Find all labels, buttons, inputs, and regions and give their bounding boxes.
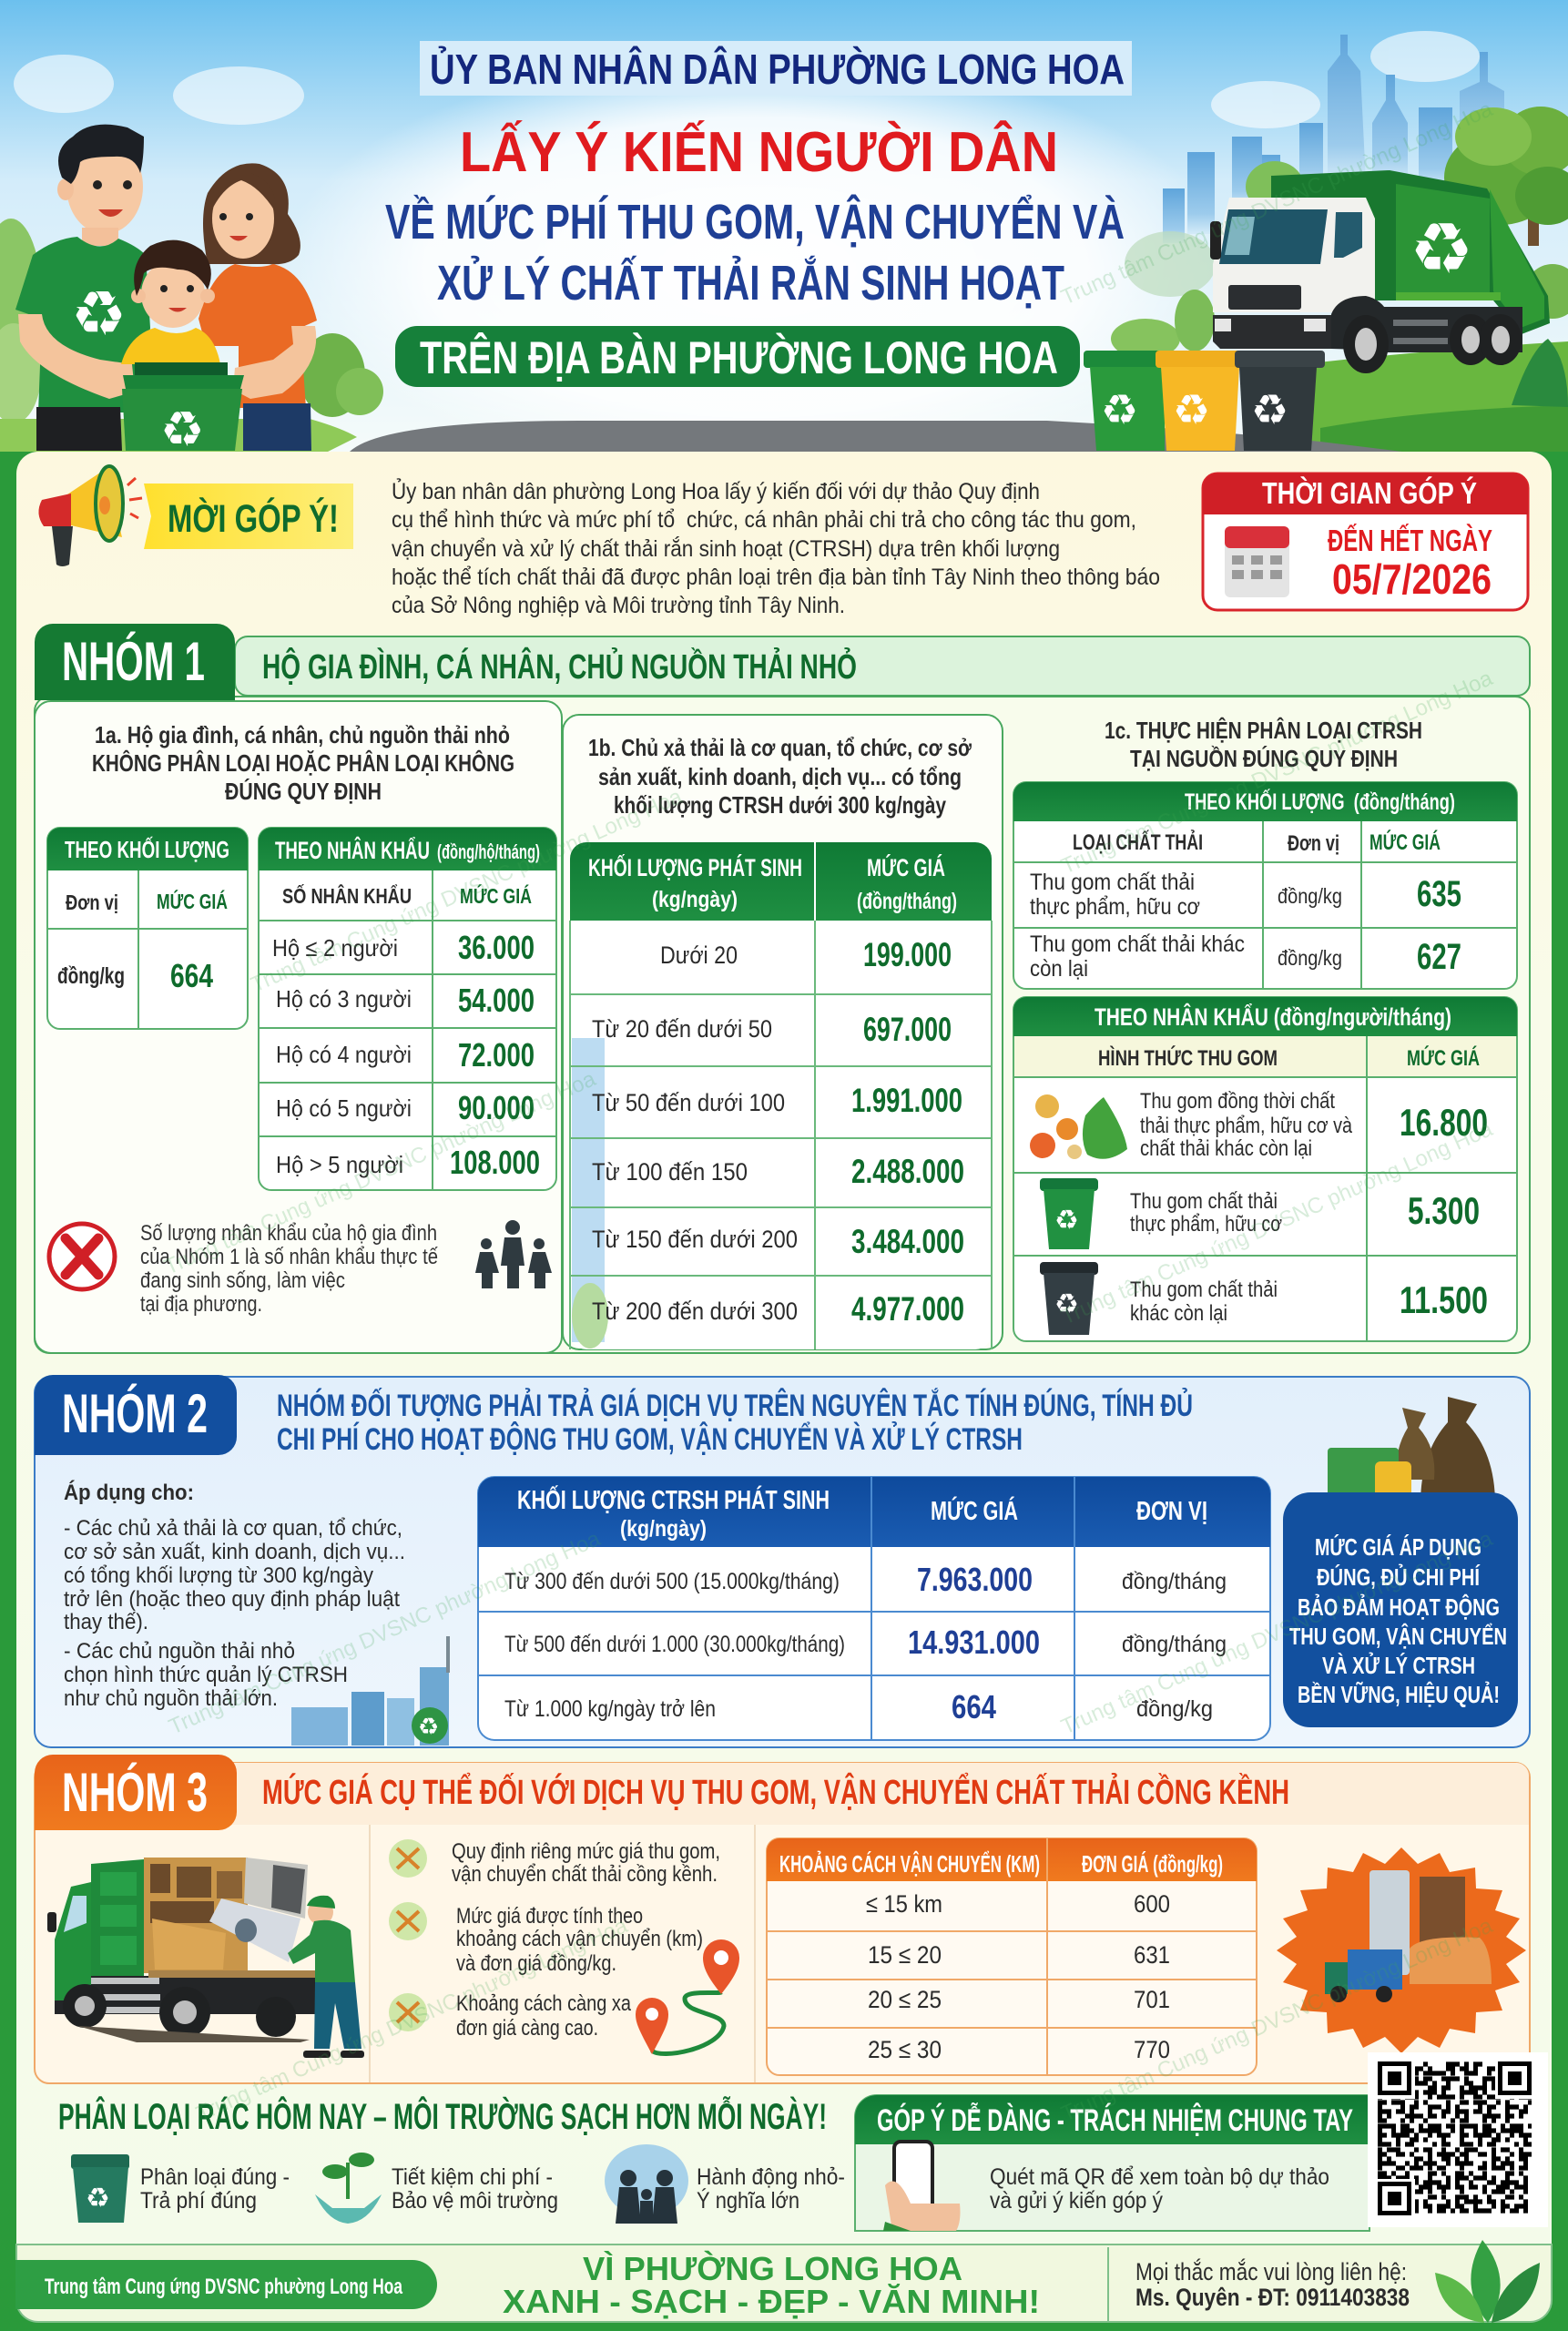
watermarks: Trung tâm Cung ứng DVSNC phường Long Hoa <box>160 1066 600 1279</box>
man <box>15 125 150 451</box>
footer: motto <box>503 2249 1040 2320</box>
table: 1b rates <box>570 842 992 1349</box>
table: by household members: 54.000 <box>458 982 535 1019</box>
table: 1b rates: MỨC GIÁ <box>867 853 945 881</box>
table: 1c by weight: Thu gom chất thải khác <box>1030 931 1245 957</box>
icon: map pins <box>636 1939 739 2054</box>
icon: bullet 3 <box>389 1993 427 2031</box>
table: 1c by person: 16.800 <box>1400 1101 1488 1144</box>
icon: phone in hand <box>883 2142 960 2231</box>
table: 1c by weight: đồng/kg <box>1278 884 1342 908</box>
table: distance rates: ≤ 15 km <box>866 1890 942 1918</box>
table: by household members: 108.000 <box>450 1144 540 1181</box>
watermarks: Trung tâm Cung ứng DVSNC phường Long Hoa <box>1057 1116 1497 1329</box>
table: 1b rates: 3.484.000 <box>851 1223 964 1260</box>
title: committee: ỦY BAN NHÂN DÂN PHƯỜNG LONG HOA <box>430 46 1125 93</box>
icon: city: ♻ <box>418 1714 439 1741</box>
slogan: PHÂN LOẠI RÁC HÔM NAY – MÔI TRƯỜNG SẠCH HƠN MỖI NGÀY! <box>58 2095 827 2137</box>
table: by household members: 90.000 <box>458 1089 535 1126</box>
panel: deadline: ĐẾN HẾT NGÀY <box>1328 524 1492 557</box>
footer: motto: XANH - SẠCH - ĐẸP - VĂN MINH! <box>503 2283 1040 2320</box>
icon: city <box>291 1636 450 1746</box>
text: applies to: Áp dụng cho: <box>64 1480 194 1505</box>
table: 1b rates: Từ 150 đến dưới 200 <box>592 1226 798 1253</box>
text: applies to: như chủ nguồn thải lớn. <box>64 1686 278 1711</box>
callout: price note: ĐÚNG, ĐỦ CHI PHÍ <box>1317 1562 1481 1591</box>
table: 1b rates: 697.000 <box>863 1011 952 1048</box>
table: 1b rates: (kg/ngày) <box>652 887 738 912</box>
text: applies to: trở lên (hoặc theo quy định pháp luật <box>64 1587 400 1612</box>
text: applies to: có tổng khối lượng từ 300 kg/ngày <box>64 1563 373 1588</box>
text: intro paragraph: Ủy ban nhân dân phường Long Hoa lấy ý kiến đối với dự thảo Quy định <box>392 477 1040 504</box>
table: by household members: Hộ có 5 người <box>276 1094 412 1122</box>
table: group 2 rates: 664 <box>952 1688 996 1725</box>
icon: green bin <box>1040 1178 1098 1249</box>
group 1 header bar <box>235 636 1530 696</box>
panel: 1c <box>1013 717 1517 1341</box>
text: applies to <box>64 1480 405 1711</box>
icon: dark bin: ♻ <box>1054 1288 1079 1320</box>
road <box>350 421 1402 452</box>
table: group 2 rates: KHỐI LƯỢNG CTRSH PHÁT SINH <box>517 1484 830 1515</box>
panel: easy feedback: GÓP Ý DỄ DÀNG - TRÁCH NHIỆM CHUNG TAY <box>877 2103 1353 2138</box>
table: group 2 rates: đồng/tháng <box>1122 1569 1227 1594</box>
table: by weight: 664 <box>170 957 213 994</box>
table: group 2 rates <box>478 1477 1270 1740</box>
man: ♻ <box>71 279 127 351</box>
icon: family silhouette <box>475 1220 552 1288</box>
1c heading: 1c. THỰC HIỆN PHÂN LOẠI CTRSH <box>1105 717 1422 744</box>
table: by household members: 72.000 <box>458 1036 535 1074</box>
table: group 2 rates: Từ 500 đến dưới 1.000 (30.000kg/tháng) <box>504 1632 845 1657</box>
tree right <box>1444 107 1568 246</box>
group 1 outer frame <box>35 697 1530 1353</box>
table: group 2 rates: (kg/ngày) <box>620 1516 707 1542</box>
table: by weight: MỨC GIÁ <box>157 889 228 913</box>
text: applies to: chọn hình thức quản lý CTRSH <box>64 1663 348 1687</box>
1b heading: 1b. Chủ xả thải là cơ quan, tổ chức, cơ sở <box>588 734 972 761</box>
table: by household members: Hộ > 5 người <box>276 1151 403 1178</box>
table: 1b rates: Dưới 20 <box>660 942 738 969</box>
table: 1c by weight: thực phẩm, hữu cơ <box>1030 894 1200 920</box>
three bins: ♻ <box>1173 385 1210 434</box>
watermarks: Trung tâm Cung ứng DVSNC phường Long Hoa <box>1057 1913 1497 2126</box>
table: 1c by person: THEO NHÂN KHẨU (đồng/người/tháng) <box>1095 1003 1451 1031</box>
bottom section <box>58 2052 1548 2231</box>
group 3 header strip <box>36 1763 1529 1825</box>
benefit 1: Trả phí đúng <box>140 2188 257 2214</box>
benefit 2: Bảo vệ môi trường <box>392 2188 558 2214</box>
table: group 2 rates: ĐƠN VỊ <box>1136 1497 1207 1526</box>
table: 1c by weight: LOẠI CHẤT THẢI <box>1073 829 1203 855</box>
icon: bullet 1 <box>389 1839 427 1878</box>
table: group 2 rates: đồng/tháng <box>1122 1632 1227 1657</box>
group 2 title: CHI PHÍ CHO HOẠT ĐỘNG THU GOM, VẬN CHUYỂN VÀ XỬ LÝ CTRSH <box>277 1421 1023 1457</box>
left trees <box>0 219 42 382</box>
illustration: truck with bulky waste <box>47 1858 364 2058</box>
group 2 title <box>277 1388 1193 1457</box>
table: by household members: 36.000 <box>458 929 535 966</box>
group 2 panel <box>35 1377 1530 1747</box>
worker <box>308 1899 333 1925</box>
text: intro paragraph <box>392 477 1160 618</box>
icon: sorting bin <box>71 2154 129 2223</box>
watermarks <box>160 97 1497 2126</box>
benefit 1 <box>140 2164 290 2214</box>
table: 1c by weight: 635 <box>1417 874 1461 914</box>
family bin <box>122 362 244 458</box>
table: 1c by person: thải thực phẩm, hữu cơ và <box>1140 1114 1353 1138</box>
footer: contact: Mọi thắc mắc vui lòng liên hệ: <box>1135 2257 1407 2285</box>
grass left <box>0 419 357 452</box>
1a heading: 1a. Hộ gia đình, cá nhân, chủ nguồn thải nhỏ <box>95 721 510 748</box>
footer: contact: Ms. Quyên - ĐT: 0911403838 <box>1135 2284 1410 2311</box>
title block <box>385 41 1132 387</box>
table: by weight: đồng/kg <box>57 963 125 989</box>
table: distance rates: 631 <box>1134 1941 1170 1969</box>
group 3 panel <box>35 1763 1530 2083</box>
table: 1c by person: 5.300 <box>1408 1189 1480 1232</box>
group 1 section <box>35 624 1530 1353</box>
table: group 2 rates: 14.931.000 <box>908 1624 1040 1661</box>
text: applies to: - Các chủ nguồn thải nhỏ <box>64 1639 295 1664</box>
icon: megaphone <box>38 466 142 566</box>
decoration: building <box>572 1038 608 1349</box>
table: distance rates <box>767 1838 1257 2075</box>
icon: dark bin <box>1040 1262 1098 1335</box>
text: intro paragraph: của Sở Nông nghiệp và Môi trường tỉnh Tây Ninh. <box>392 593 845 618</box>
panel: deadline <box>1203 473 1528 610</box>
table: 1c by person: Thu gom đồng thời chất <box>1140 1089 1335 1114</box>
table: 1c by person: 11.500 <box>1400 1278 1488 1321</box>
table: 1c by weight: Thu gom chất thải <box>1030 870 1195 895</box>
table: 1c by weight <box>1013 782 1517 989</box>
table: 1b rates: 2.488.000 <box>851 1153 964 1190</box>
watermarks: Trung tâm Cung ứng DVSNC phường Long Hoa <box>1057 666 1497 879</box>
group 3 tab <box>35 1755 237 1830</box>
garbage truck <box>1210 170 1550 373</box>
table: 1c by person: thực phẩm, hữu cơ <box>1130 1212 1282 1237</box>
table: 1c by person: Thu gom chất thải <box>1130 1277 1278 1302</box>
table: 1b rates: 4.977.000 <box>851 1290 964 1328</box>
note: household members <box>140 1221 439 1317</box>
benefit 3: Ý nghĩa lớn <box>697 2187 799 2214</box>
note: household members: đang sinh sống, làm việc <box>140 1268 345 1293</box>
table: distance rates: 20 ≤ 25 <box>868 1986 942 2013</box>
watermarks: Trung tâm Cung ứng DVSNC phường Long Hoa <box>247 784 687 997</box>
table: distance rates: 600 <box>1134 1890 1170 1918</box>
watermarks: Trung tâm Cung ứng DVSNC phường Long Hoa <box>192 1913 632 2126</box>
group 2 tab: NHÓM 2 <box>62 1383 208 1444</box>
table: 1b rates: 1.991.000 <box>851 1082 962 1119</box>
group 1 title: HỘ GIA ĐÌNH, CÁ NHÂN, CHỦ NGUỒN THẢI NHỎ <box>262 646 857 687</box>
main panel background <box>16 452 1552 2322</box>
title: subject line 1: VỀ MỨC PHÍ THU GOM, VẬN CHUYỂN VÀ <box>385 194 1125 249</box>
city skyline <box>1163 35 1504 243</box>
text: intro paragraph: cụ thể hình thức và mức phí tổ chức, cá nhân phải chi trả cho công tác thu gom, <box>392 507 1136 533</box>
list: rules: khoảng cách vận chuyển (km) <box>456 1927 703 1951</box>
title: main: LẤY Ý KIẾN NGƯỜI DÂN <box>460 121 1058 184</box>
benefit 3: Hành động nhỏ- <box>697 2164 845 2190</box>
table: group 2 rates: Từ 1.000 kg/ngày trở lên <box>504 1696 716 1722</box>
child <box>121 240 220 364</box>
table: distance rates: 25 ≤ 30 <box>868 2036 942 2063</box>
table: 1b rates: Từ 100 đến 150 <box>592 1158 748 1186</box>
note: household members: Số lượng nhân khẩu của hộ gia đình <box>140 1221 437 1246</box>
table: 1c by person: MỨC GIÁ <box>1407 1045 1480 1071</box>
group 1 tab <box>35 624 235 700</box>
list: rules: Quy định riêng mức giá thu gom, <box>452 1839 720 1864</box>
callout: price note: BỀN VỮNG, HIỆU QUẢ! <box>1298 1681 1500 1708</box>
table: 1c by person <box>1013 997 1517 1341</box>
table: by household members: (đồng/hộ/tháng) <box>437 840 540 863</box>
callout: price note: BẢO ĐẢM HOẠT ĐỘNG <box>1298 1593 1500 1621</box>
icon: food waste <box>1030 1094 1127 1159</box>
callout: price note: VÀ XỬ LÝ CTRSH <box>1322 1651 1475 1679</box>
garbage truck: ♻ <box>1410 209 1473 290</box>
footer: organisation pill: Trung tâm Cung ứng DVSNC phường Long Hoa <box>45 2275 402 2299</box>
text: intro paragraph: hoặc thể tích chất thải đã được phân loại trên địa bàn tỉnh Tây Ninh theo thông báo <box>392 565 1160 590</box>
group 2 tab <box>35 1375 237 1455</box>
table: 1c by person: Thu gom chất thải <box>1130 1189 1278 1214</box>
grass right <box>1302 341 1568 452</box>
note: household members: của Nhóm 1 là số nhân khẩu thực tế <box>140 1245 439 1269</box>
tag: invite <box>144 484 353 549</box>
table: group 2 rates: Từ 300 đến dưới 500 (15.000kg/tháng) <box>504 1569 840 1594</box>
1b heading: sản xuất, kinh doanh, dịch vụ... có tổng <box>598 763 962 790</box>
panel: 1a <box>35 701 562 1353</box>
1a heading <box>92 721 514 805</box>
text: applies to: thay thế). <box>64 1610 148 1634</box>
list: rules: Khoảng cách càng xa <box>456 1991 632 2016</box>
footer: contact <box>1135 2257 1410 2311</box>
family bin: ♻ <box>160 401 204 458</box>
panel: deadline: 05/7/2026 <box>1332 555 1492 603</box>
table: by household members: THEO NHÂN KHẨU <box>275 836 430 864</box>
icon: red cross <box>49 1224 115 1289</box>
panel: easy feedback: Quét mã QR để xem toàn bộ dự thảo <box>990 2164 1329 2190</box>
list: rules: vận chuyển chất thải cồng kềnh. <box>452 1862 718 1887</box>
group 2 section <box>35 1375 1530 1747</box>
list: rules: Mức giá được tính theo <box>456 1904 643 1929</box>
three bins: ♻ <box>1251 385 1288 434</box>
table: 1b rates: 199.000 <box>863 936 952 973</box>
table: 1c by person: khác còn lại <box>1130 1301 1227 1326</box>
table: group 2 rates: đồng/kg <box>1136 1696 1213 1722</box>
text: intro paragraph: vận chuyển và xử lý chất thải rắn sinh hoạt (CTRSH) dựa trên khối lượng <box>392 535 1060 562</box>
1c heading: TẠI NGUỒN ĐÚNG QUY ĐỊNH <box>1130 745 1398 772</box>
icon: plant in hands <box>315 2153 382 2224</box>
table: by household members: MỨC GIÁ <box>460 883 532 908</box>
table: by weight: Đơn vị <box>66 891 118 914</box>
table: 1c by weight: MỨC GIÁ <box>1369 830 1441 855</box>
distant trees and grass <box>1125 231 1216 297</box>
panel: easy feedback <box>855 2095 1369 2231</box>
note: household members: tại địa phương. <box>140 1292 262 1317</box>
1a heading: KHÔNG PHÂN LOẠI HOẶC PHÂN LOẠI KHÔNG <box>92 749 514 777</box>
table: distance rates: 701 <box>1134 1986 1170 2013</box>
table: distance rates: 770 <box>1134 2036 1170 2063</box>
benefit 1: Phân loại đúng - <box>140 2164 290 2190</box>
table: 1c by weight: Đơn vị <box>1288 831 1339 856</box>
table: 1b rates: (đồng/tháng) <box>857 889 957 914</box>
benefit 2: Tiết kiệm chi phí - <box>392 2164 553 2190</box>
callout: price note: THU GOM, VẬN CHUYỂN <box>1289 1623 1507 1650</box>
table: by household members: Hộ ≤ 2 người <box>272 934 398 962</box>
text: applies to: cơ sở sản xuất, kinh doanh, dịch vụ... <box>64 1540 405 1564</box>
group 1 tab: NHÓM 1 <box>62 631 205 692</box>
footer: organisation pill <box>15 2260 437 2309</box>
clouds <box>14 31 1480 128</box>
family <box>15 125 317 458</box>
table: distance rates: 15 ≤ 20 <box>868 1941 942 1969</box>
table: by household members <box>259 828 556 1190</box>
1b heading: khối lượng CTRSH dưới 300 kg/ngày <box>614 791 946 819</box>
icon: sorting bin: ♻ <box>86 2183 110 2214</box>
header banner illustration <box>0 0 1568 473</box>
footer: motto: VÌ PHƯỜNG LONG HOA <box>583 2249 962 2287</box>
table: group 2 rates: MỨC GIÁ <box>931 1495 1018 1526</box>
panel: deadline: THỜI GIAN GÓP Ý <box>1262 476 1477 510</box>
table: 1b rates: Từ 20 đến dưới 50 <box>592 1015 772 1043</box>
table: 1b rates: Từ 50 đến dưới 100 <box>592 1089 785 1116</box>
table: 1c by weight: 627 <box>1417 937 1461 977</box>
tag: invite: MỜI GÓP Ý! <box>168 496 339 541</box>
pill: area: TRÊN ĐỊA BÀN PHƯỜNG LONG HOA <box>420 332 1058 383</box>
watermarks: Trung tâm Cung ứng DVSNC phường Long Hoa <box>165 1526 605 1739</box>
list: rules: đơn giá càng cao. <box>456 2016 598 2041</box>
watermarks: Trung tâm Cung ứng DVSNC phường Long Hoa <box>1057 97 1497 310</box>
table: by household members: SỐ NHÂN KHẨU <box>282 883 412 908</box>
three bins: ♻ <box>1101 385 1138 434</box>
table: group 2 rates: 7.963.000 <box>917 1561 1033 1598</box>
table: by weight: THEO KHỐI LƯỢNG <box>65 836 229 863</box>
panel: easy feedback: và gửi ý kiến góp ý <box>990 2188 1163 2214</box>
title: subject line 2: XỬ LÝ CHẤT THẢI RẮN SINH HOẠT <box>437 255 1064 310</box>
table: 1c by weight: THEO KHỐI LƯỢNG (đồng/tháng) <box>1185 788 1455 815</box>
icon: family in cloud <box>605 2144 688 2224</box>
group 3 section <box>35 1755 1530 2083</box>
list: rules: và đơn giá đồng/kg. <box>456 1951 616 1976</box>
table: 1b rates: KHỐI LƯỢNG PHÁT SINH <box>588 852 802 881</box>
table: distance rates: ĐƠN GIÁ (đồng/kg) <box>1082 1850 1223 1878</box>
panel: 1b <box>563 715 1003 1349</box>
1c heading <box>1105 717 1422 772</box>
benefit 3 <box>697 2164 845 2214</box>
table: 1c by person: chất thải khác còn lại <box>1140 1136 1312 1161</box>
benefit 2 <box>392 2164 558 2214</box>
footer <box>15 2240 1552 2323</box>
icon: calendar <box>1225 526 1289 597</box>
table: 1b rates: Từ 200 đến dưới 300 <box>592 1298 798 1325</box>
group 3 tab: NHÓM 3 <box>62 1762 208 1823</box>
table: by weight <box>47 828 248 1029</box>
1a heading: ĐÚNG QUY ĐỊNH <box>225 778 382 805</box>
icon: leaves <box>1435 2240 1540 2323</box>
woman <box>199 163 317 451</box>
three bins <box>1084 351 1325 451</box>
icon: money bags <box>1328 1397 1495 1513</box>
text: applies to: - Các chủ xả thải là cơ quan, tổ chức, <box>64 1516 402 1541</box>
intro section <box>38 466 1528 618</box>
icon: starburst with furniture <box>1277 1847 1526 2053</box>
list: rules <box>389 1839 720 2041</box>
callout: price note <box>1283 1492 1518 1727</box>
pill: area <box>395 326 1080 387</box>
table: by household members: Hộ có 4 người <box>276 1041 412 1068</box>
group 2 title: NHÓM ĐỐI TƯỢNG PHẢI TRẢ GIÁ DỊCH VỤ TRÊN NGUYÊN TẮC TÍNH ĐÚNG, TÍNH ĐỦ <box>277 1388 1193 1423</box>
watermarks: Trung tâm Cung ứng DVSNC phường Long Hoa <box>1057 1526 1497 1739</box>
icon: bullet 2 <box>389 1902 427 1940</box>
1b heading <box>588 734 972 819</box>
table: 1c by weight: đồng/kg <box>1278 946 1342 970</box>
table: by household members: Hộ có 3 người <box>276 985 412 1013</box>
table: 1c by person: HÌNH THỨC THU GOM <box>1098 1045 1278 1071</box>
table: distance rates: KHOẢNG CÁCH VẬN CHUYỂN (KM) <box>779 1850 1040 1878</box>
icon: green bin: ♻ <box>1054 1205 1079 1237</box>
QR code <box>1368 2052 1548 2227</box>
callout: price note: MỨC GIÁ ÁP DỤNG <box>1315 1533 1481 1561</box>
table: 1c by weight: còn lại <box>1030 956 1088 982</box>
